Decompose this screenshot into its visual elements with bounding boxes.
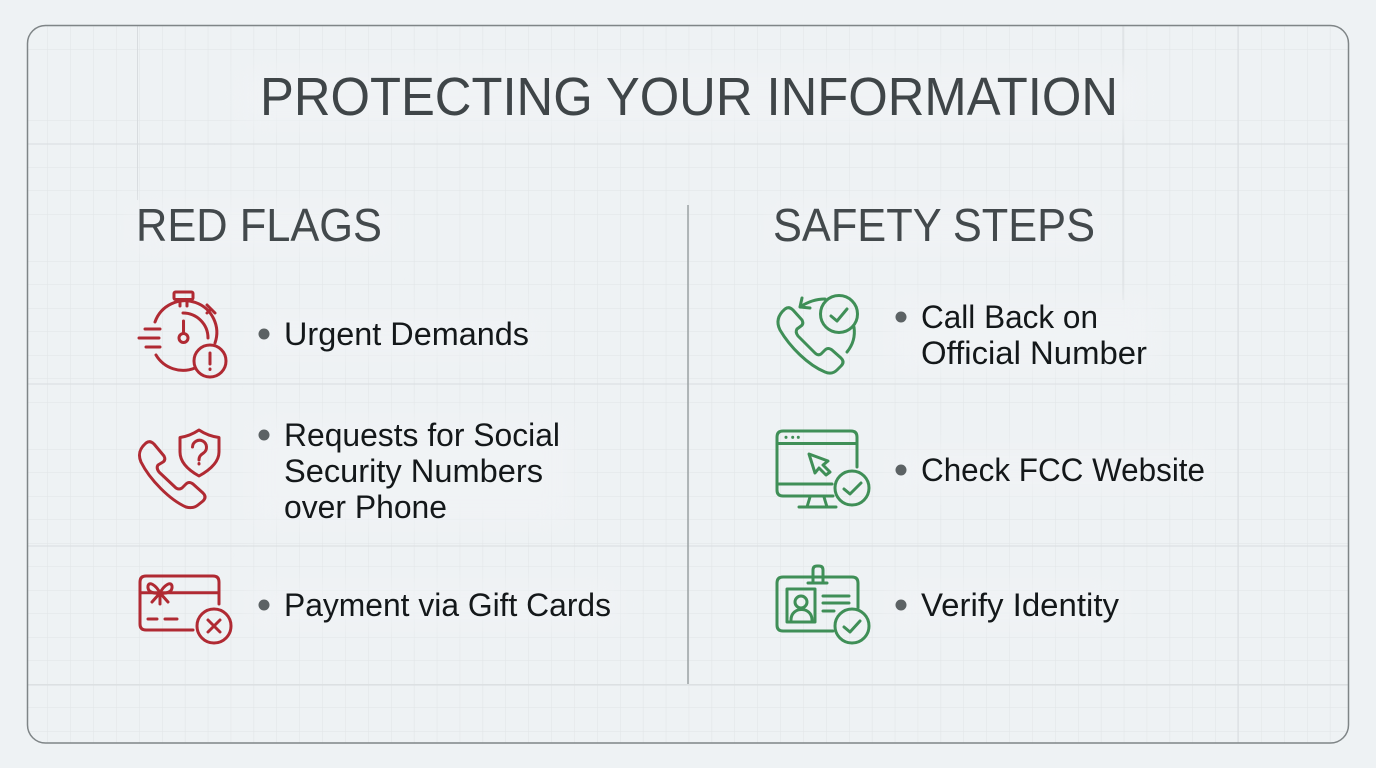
bullet: requests for social security numbers: Security Numbers — [284, 453, 543, 489]
bullet: urgent demands: Urgent Demands — [284, 316, 529, 352]
panel: safety steps — [773, 199, 1205, 643]
icon: gift card with x — [140, 576, 231, 643]
icon: monitor with cursor and check — [777, 431, 869, 507]
title: PROTECTING YOUR INFORMATION — [260, 67, 1118, 127]
bullet: call back on official number: Call Back on — [921, 299, 1098, 335]
bullet: requests for social security numbers — [258, 417, 560, 525]
bullet: call back on official number: Official Number — [921, 335, 1147, 371]
bullet: requests for social security numbers: Requests for Social — [284, 417, 560, 453]
bullet: call back on official number — [896, 299, 1147, 371]
heading: safety steps: SAFETY STEPS — [773, 199, 1095, 251]
icon: phone call back with check — [778, 296, 858, 373]
bullet: check fcc website: Check FCC Website — [921, 452, 1205, 488]
heading: red flags: RED FLAGS — [136, 199, 382, 251]
bullet: requests for social security numbers: over Phone — [284, 489, 447, 525]
icon: id badge with check — [777, 566, 869, 643]
divider between columns — [687, 205, 689, 684]
icon: phone with question shield — [139, 430, 219, 508]
panel: red flags — [136, 199, 611, 643]
bullet: verify identity: Verify Identity — [921, 587, 1119, 623]
icon: stopwatch with alert — [139, 292, 226, 377]
bullet: payment via gift cards: Payment via Gift Cards — [284, 587, 611, 623]
